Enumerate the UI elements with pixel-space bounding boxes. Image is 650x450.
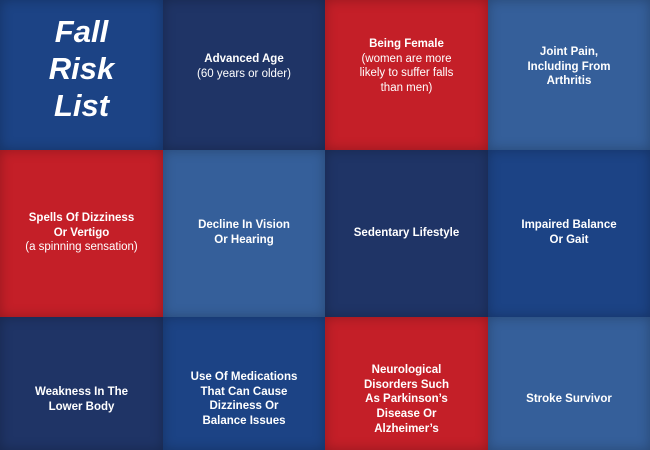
text (360, 38, 453, 94)
text: Lower Body (49, 401, 114, 413)
text (197, 53, 291, 80)
panel: weakness (0, 317, 163, 450)
text (35, 386, 128, 413)
panel: balance (488, 150, 650, 317)
text: Dizziness Or (209, 400, 279, 412)
title (49, 14, 116, 123)
panel: title (0, 0, 163, 150)
panel: vision (163, 150, 325, 317)
panel: joint pain (488, 0, 650, 150)
text: (women are more (361, 53, 452, 65)
text: Spells Of Dizziness (29, 212, 134, 224)
text: Being Female (369, 38, 444, 50)
text (191, 371, 297, 427)
panel: being female (325, 0, 488, 150)
text: Disease Or (376, 408, 437, 420)
title: Fall (55, 14, 108, 49)
text: Or Gait (550, 234, 588, 246)
text (521, 219, 617, 246)
title: Risk (49, 51, 114, 86)
text (527, 46, 611, 87)
title: List (54, 88, 109, 123)
text (198, 219, 290, 246)
text: Weakness In The (35, 386, 128, 398)
text: Including From (527, 61, 611, 73)
text: Balance Issues (202, 415, 286, 427)
text: than men) (381, 82, 432, 94)
panel: dizziness (0, 150, 163, 317)
text: (a spinning sensation) (25, 241, 138, 253)
text: Neurological (372, 364, 441, 376)
text: Decline In Vision (198, 219, 290, 231)
text: Alzheimer’s (374, 423, 439, 435)
text: Or Hearing (214, 234, 274, 246)
text (25, 212, 138, 253)
panel: advanced age (163, 0, 325, 150)
text: Arthritis (547, 75, 591, 87)
text: Impaired Balance (521, 219, 617, 231)
text: Advanced Age (204, 53, 284, 65)
text: (60 years or older) (197, 68, 291, 80)
text: Disorders Such (364, 379, 449, 391)
text (364, 364, 449, 435)
text: Use Of Medications (191, 371, 297, 383)
text: Joint Pain, (540, 46, 598, 58)
text: Or Vertigo (54, 227, 109, 239)
panel: sedentary (325, 150, 488, 317)
panel: stroke (488, 317, 650, 450)
text: As Parkinson’s (365, 393, 448, 405)
text: Stroke Survivor (526, 393, 612, 405)
panel: medications (163, 317, 325, 450)
text: likely to suffer falls (360, 67, 453, 79)
text: That Can Cause (201, 386, 287, 398)
panel: neurological (325, 317, 488, 450)
text: Sedentary Lifestyle (354, 227, 459, 239)
